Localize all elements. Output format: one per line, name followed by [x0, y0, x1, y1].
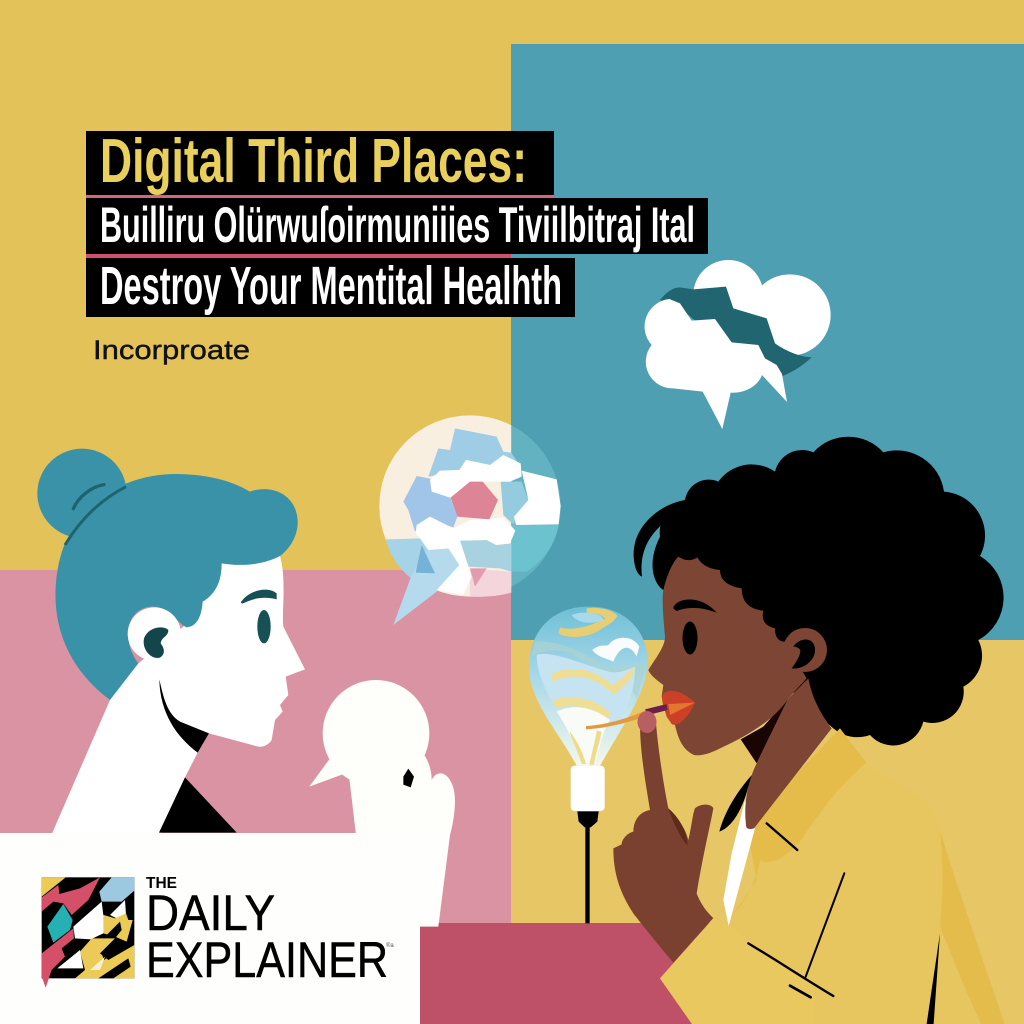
pink hexagon centre [451, 482, 498, 519]
background: teal panel [511, 44, 1024, 640]
bubble circle [323, 680, 429, 787]
raised hand [348, 753, 455, 927]
woman ear [128, 607, 181, 661]
bubble over warm side [379, 415, 512, 597]
teal fragment [47, 904, 73, 943]
woman eyebrow [241, 590, 277, 604]
woman neck shadow [159, 679, 209, 753]
woman profile figure [37, 449, 305, 837]
woman eye [257, 610, 271, 643]
teal torn band [660, 287, 812, 376]
top blue cloud [572, 613, 603, 623]
white fragment middle [416, 517, 515, 595]
heading line 1: Digital Third Places: [100, 127, 527, 196]
black tie strip [719, 770, 757, 832]
crimson lower band [42, 928, 74, 988]
lips [662, 691, 695, 725]
jacket collar [732, 728, 866, 917]
inner light blue [537, 654, 635, 723]
logo word: explainer: EXPLAINER [146, 932, 388, 988]
bubble over teal side [511, 426, 560, 586]
bubble tail [393, 548, 459, 625]
torn cloud speech bubbles [645, 260, 831, 429]
cream lower fragment [90, 957, 105, 970]
heading line 3: Destroy Your Mentital Healhth [100, 256, 562, 316]
lower right teal band [511, 525, 559, 572]
pink rule 2 [86, 254, 511, 258]
jaw shadow [741, 698, 788, 763]
fingernail [638, 711, 656, 733]
title block [86, 127, 708, 317]
bulb stem [585, 823, 590, 923]
crimson band [42, 877, 100, 915]
ear [783, 628, 827, 672]
back cloud [693, 260, 831, 356]
hair tie [65, 487, 126, 545]
face [648, 557, 807, 755]
white fragment right [514, 471, 561, 525]
white heart swirl [592, 638, 639, 662]
white sliver [110, 900, 126, 918]
translucent brain speech bubble [379, 415, 561, 625]
lower centre blue [460, 540, 511, 572]
white glow [557, 707, 610, 763]
straw [586, 704, 668, 729]
white base [571, 766, 605, 811]
black stroke two [102, 941, 129, 960]
background: lower right yellow panel [511, 640, 1024, 1024]
bulb glass [529, 607, 648, 766]
white speech bubble and hand [309, 680, 455, 927]
woman body and face [51, 556, 305, 837]
eyebrow [673, 599, 717, 613]
yellow arch upper [551, 667, 634, 695]
afro hair [653, 437, 1004, 745]
registered mark: ®a [386, 942, 394, 949]
jacket seam lines [748, 823, 844, 997]
woman top [159, 777, 237, 833]
logo word: daily: DAILY [146, 885, 275, 941]
hand mark [403, 769, 414, 787]
white fragment upper [430, 455, 522, 498]
eye [682, 622, 698, 654]
neck [745, 678, 832, 829]
ear inner [792, 640, 815, 669]
yellow corner [42, 877, 66, 897]
white lower fragment [57, 950, 83, 968]
background: pink panel [0, 570, 511, 930]
logo mark [42, 877, 134, 988]
finger crease [668, 808, 688, 846]
sleeve line [926, 933, 940, 1024]
background: crimson block [420, 923, 720, 1024]
yellow lower field [75, 938, 134, 978]
title bar 2 [86, 198, 708, 254]
white fragment [73, 902, 115, 939]
logo square [42, 877, 134, 978]
black stroke three [98, 958, 131, 978]
top blue shape [428, 428, 522, 477]
yellow star [103, 913, 133, 942]
front cloud [645, 299, 787, 429]
hand lower part [356, 830, 450, 924]
jacket [660, 728, 1006, 1024]
afro stray curl [634, 500, 685, 577]
yellow filament [570, 731, 602, 765]
black stroke one [62, 939, 90, 958]
blue fragment [99, 877, 134, 902]
raised hand and finger [613, 714, 713, 963]
left blue shape [403, 476, 457, 532]
black star accent [107, 922, 122, 938]
bubble tail [309, 750, 357, 787]
shirt [723, 800, 755, 926]
logo: The Daily Explainer [42, 875, 394, 988]
woman inner ear [144, 627, 168, 658]
yellow arch lower [553, 697, 612, 718]
green swirl [532, 642, 647, 700]
white logo panel [0, 833, 420, 1024]
woman with afro figure [586, 437, 1006, 1024]
light bulb [529, 607, 648, 923]
jacket sleeve shade [940, 830, 1006, 1024]
bun highlight [73, 485, 104, 509]
woman hair bun [37, 449, 127, 538]
title bar 1 [86, 131, 554, 195]
tail darker triangle [416, 545, 435, 573]
caption text: Incorproate [93, 335, 250, 365]
bulb socket [577, 811, 599, 827]
pink rule 1 [86, 195, 554, 198]
logo word: the: THE [146, 875, 177, 892]
lower blue band [386, 538, 459, 592]
right blue shape [501, 482, 528, 525]
top yellow squiggle [558, 608, 617, 637]
pale lower segment [470, 568, 511, 597]
woman hair [55, 474, 298, 700]
title bar 3 [86, 258, 575, 317]
sleeve cuff [660, 918, 813, 1024]
straw tip [645, 704, 668, 715]
pink fragment lower [470, 568, 487, 587]
lip highlight [668, 703, 695, 715]
